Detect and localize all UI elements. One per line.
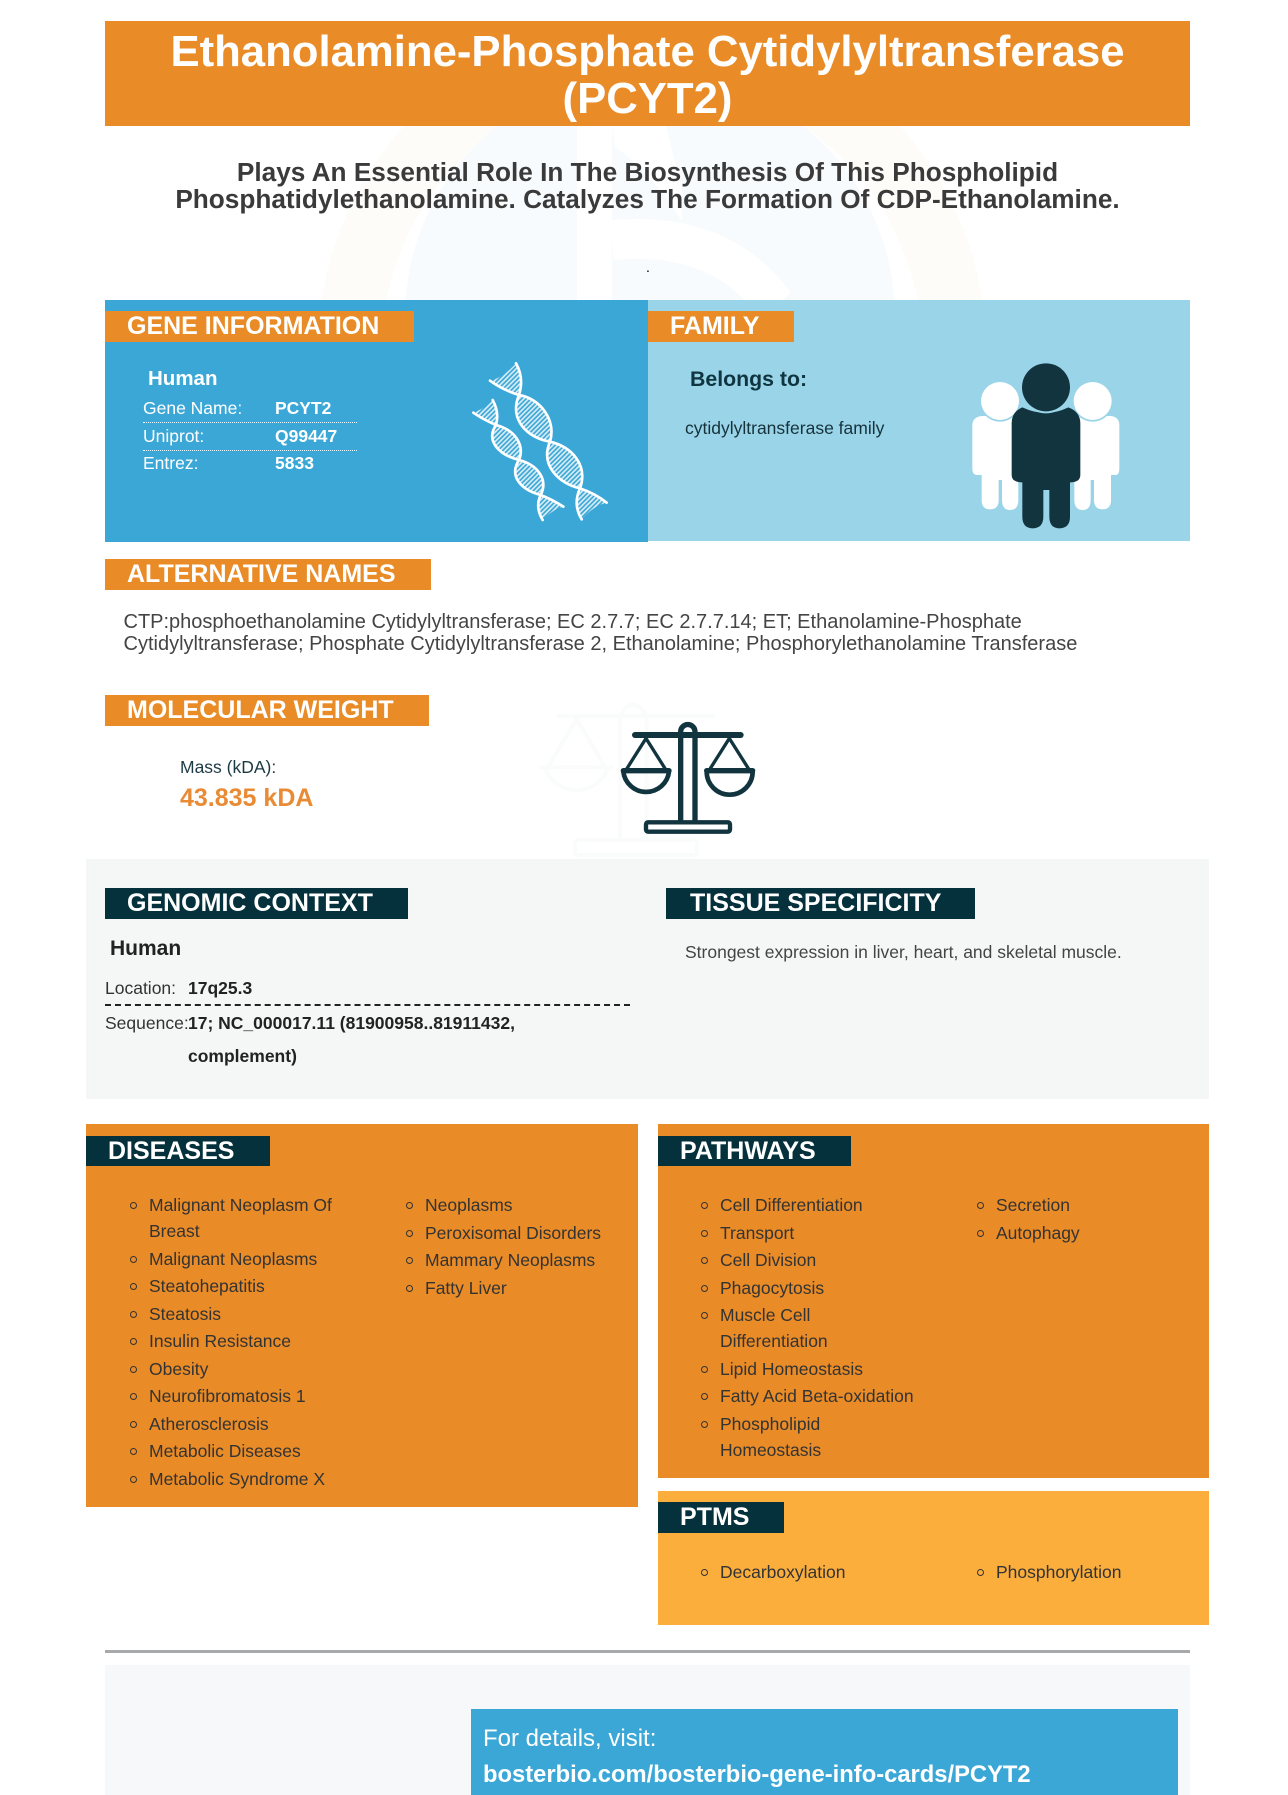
panel: molecular weight <box>105 695 756 834</box>
ptm item: phosphorylation: Phosphorylation <box>996 1562 1122 1582</box>
subtitle: Phosphatidylethanolamine. Catalyzes The Formation Of CDP-Ethanolamine. <box>175 184 1120 214</box>
heading: pathways: PATHWAYS <box>680 1137 816 1165</box>
disease list column 2: Peroxisomal Disorders <box>425 1223 601 1243</box>
icon: dna <box>472 362 608 522</box>
heading: genomic context: GENOMIC CONTEXT <box>127 889 373 917</box>
heading: tissue specificity: TISSUE SPECIFICITY <box>690 889 941 917</box>
location row: Location: <box>105 978 176 998</box>
disease list column 1: Steatohepatitis <box>149 1276 265 1296</box>
gene name row <box>143 394 357 423</box>
disease list column 2: Mammary Neoplasms <box>425 1250 595 1270</box>
disease list column 1: Neurofibromatosis 1 <box>149 1386 306 1406</box>
entrez row: Entrez: <box>143 453 198 473</box>
pathway list column 2: Autophagy <box>996 1223 1080 1243</box>
callout: details link: bosterbio.com/bosterbio-gene-info-cards/PCYT2 <box>483 1761 1031 1788</box>
family text: cytidylyltransferase family <box>685 418 884 438</box>
heading: diseases <box>86 1136 270 1166</box>
disease list column 1: Obesity <box>149 1359 208 1379</box>
pathway list column 1: Cell Differentiation <box>720 1195 863 1215</box>
panel: pathways <box>658 1124 1209 1478</box>
uniprot row <box>143 423 357 451</box>
species label: Human <box>148 367 217 390</box>
subtitle: Plays An Essential Role In The Biosynthesis Of This Phospholipid <box>237 157 1058 187</box>
pathway list column 1 <box>701 1195 914 1460</box>
heading: molecular weight: MOLECULAR WEIGHT <box>127 696 394 724</box>
panel: diseases <box>86 1124 638 1507</box>
disease list column 1: Insulin Resistance <box>149 1331 291 1351</box>
background watermark <box>0 0 1288 300</box>
disease list column 2: Neoplasms <box>425 1195 513 1215</box>
heading: ptms <box>658 1502 784 1533</box>
pathway list column 1: Muscle Cell <box>720 1305 810 1325</box>
pathway list column 1: Lipid Homeostasis <box>720 1359 863 1379</box>
sequence row: 17; NC_000017.11 (81900958..81911432, <box>188 1013 515 1033</box>
sequence row: Sequence: <box>105 1013 189 1033</box>
heading: gene information: GENE INFORMATION <box>127 312 379 340</box>
panel: footer <box>105 1665 1190 1795</box>
heading: pathways <box>658 1136 851 1166</box>
species label: Human <box>110 937 181 960</box>
disease list column 1: Malignant Neoplasms <box>149 1249 317 1269</box>
ptm item: decarboxylation: Decarboxylation <box>720 1562 845 1582</box>
pathway list column 1: Fatty Acid Beta-oxidation <box>720 1386 914 1406</box>
title: (PCYT2) <box>563 74 732 123</box>
belongs to label: Belongs to: <box>690 367 807 391</box>
heading: alternative names: ALTERNATIVE NAMES <box>127 560 396 588</box>
disease list column 1: Atherosclerosis <box>149 1414 269 1434</box>
pathway list column 2: Secretion <box>996 1195 1070 1215</box>
pathway list column 1: Phospholipid <box>720 1414 820 1434</box>
pathway list column 1: Phagocytosis <box>720 1278 824 1298</box>
location row: 17q25.3 <box>188 978 252 998</box>
heading: family: FAMILY <box>670 312 759 340</box>
title <box>105 21 1190 126</box>
icon: people <box>972 363 1120 528</box>
gene name row: PCYT2 <box>275 398 331 418</box>
disease list column 1: Metabolic Diseases <box>149 1441 301 1461</box>
alternative names text: Cytidylyltransferase; Phosphate Cytidylyltransferase 2, Ethanolamine; Phosphorylethanolamine Transferase <box>124 632 1077 654</box>
small dot text: . <box>646 259 650 275</box>
disease list column 1: Breast <box>149 1221 200 1241</box>
uniprot row: Q99447 <box>275 426 337 446</box>
heading: diseases: DISEASES <box>108 1137 234 1165</box>
gene name row: Gene Name: <box>143 398 242 418</box>
alternative names text: CTP:phosphoethanolamine Cytidylyltransferase; EC 2.7.7; EC 2.7.7.14; ET; Ethanolamine-Phosphate <box>124 610 1022 632</box>
disease list column 1: Malignant Neoplasm Of <box>149 1195 332 1215</box>
pathway list column 1: Homeostasis <box>720 1440 821 1460</box>
panel: gene information <box>105 300 648 542</box>
mass label: Mass (kDA): <box>180 757 276 777</box>
heading: family <box>648 311 794 342</box>
panel: family <box>648 300 1190 541</box>
panel: ptms <box>658 1491 1209 1625</box>
disease list column 1: Metabolic Syndrome X <box>149 1469 325 1489</box>
disease list column 1 <box>130 1195 332 1489</box>
disease list column 2: Fatty Liver <box>425 1278 507 1298</box>
entrez row <box>143 453 314 473</box>
pathway list column 1: Cell Division <box>720 1250 816 1270</box>
pathway list column 2 <box>977 1195 1080 1243</box>
heading: ptms: PTMS <box>680 1503 749 1531</box>
alternative names text <box>124 610 1077 654</box>
location row <box>105 973 630 1006</box>
sequence row <box>105 1013 515 1066</box>
disease list column 2 <box>406 1195 601 1298</box>
sequence row: complement) <box>188 1046 297 1066</box>
entrez row: 5833 <box>275 453 314 473</box>
pathway list column 1: Transport <box>720 1223 794 1243</box>
icon: balance scale <box>620 722 756 834</box>
callout: details link <box>471 1709 1178 1795</box>
callout: details link: For details, visit: <box>483 1725 656 1752</box>
title: Ethanolamine-Phosphate Cytidylyltransferase <box>170 27 1125 76</box>
mass value: 43.835 kDA <box>180 784 313 812</box>
disease list column 1: Steatosis <box>149 1304 221 1324</box>
tissue specificity text: Strongest expression in liver, heart, and skeletal muscle. <box>685 942 1122 962</box>
pathway list column 1: Differentiation <box>720 1331 828 1351</box>
uniprot row: Uniprot: <box>143 426 204 446</box>
subtitle <box>175 157 1120 214</box>
panel: genomic context and tissue specificity <box>86 859 1209 1099</box>
